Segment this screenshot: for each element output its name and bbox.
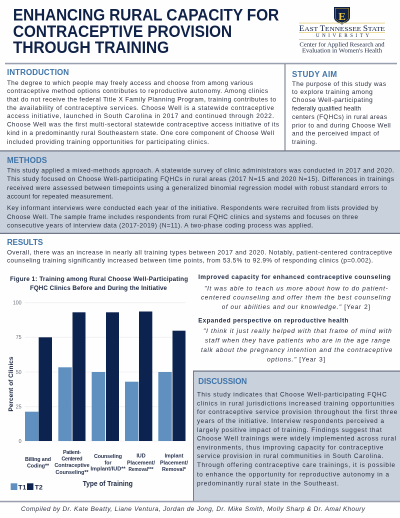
- quote: year 2: centered counseling and offer them the best counseling: [201, 294, 391, 301]
- title: [13, 6, 279, 57]
- text block: discussion body: predominantly rural state in the Southeast.: [197, 480, 339, 487]
- panel: qualitative findings: [198, 274, 393, 363]
- chart y axis labels: 25: [16, 404, 22, 410]
- heading: discussion: DISCUSSION: [198, 377, 247, 386]
- heading: introduction: INTRODUCTION: [7, 68, 69, 77]
- text block: study aim body: centers (FQHCs) in rural areas: [292, 114, 387, 121]
- text block: introduction body: kind in a predominantly rural Southeastern state. One core component of Choose Well: [7, 130, 274, 137]
- text block: results summary: counseling training significantly increased between time points, from 53.5% to 92.9% of responding clinics (p=0.002).: [7, 258, 373, 265]
- category labels: Contraceptive: [54, 463, 90, 469]
- logo: East Tennessee State University: [299, 7, 385, 54]
- panel: introduction: [7, 68, 279, 146]
- text block: methods body: Key informant interviews were conducted each year of the initiative. Respondents were recruited from lists provided by: [7, 205, 379, 212]
- logo: East Tennessee State University: UNIVERSITY: [316, 34, 370, 39]
- text block: results summary: Overall, there was an increase in nearly all training types between 2017 and 2020. Notably, patient-centered contraceptive: [7, 249, 392, 256]
- panel: results: [7, 238, 392, 265]
- text block: study aim body: Choose Well-participating: [292, 97, 373, 104]
- text block: results summary: [7, 249, 392, 265]
- chart: figure 1 grouped bar chart: [8, 276, 189, 492]
- category labels: Placement/: [160, 460, 189, 466]
- text block: methods body: This study focused on Choose Well-participating FQHCs in rural areas (2017 N=15 and 2020 N=15). Differences in trainings: [7, 176, 394, 183]
- category labels: for: [104, 460, 112, 466]
- text block: study aim body: [292, 81, 391, 146]
- category labels: IUD: [136, 454, 146, 460]
- category labels: Patient-: [63, 450, 81, 456]
- panel: discussion: [193, 370, 400, 502]
- heading: figure title: [10, 276, 188, 292]
- text block: introduction body: [7, 80, 279, 146]
- text block: discussion body: years of the initiative. Interview respondents perceived a: [197, 418, 384, 425]
- quote: year 3: "I think it just really helped with that frame of mind with: [203, 328, 392, 335]
- x axis title: Type of Training: [83, 481, 133, 488]
- footer: credits: Compiled by Dr. Kate Beatty, Liane Ventura, Jordan de Jong, Dr. Mike Smith, Molly Sharp & Dr. Amal Khoury: [21, 506, 366, 513]
- title: ENHANCING RURAL CAPACITY FOR: [13, 6, 279, 24]
- text block: discussion body: clinics in rural jurisdictions increased training opportunities: [197, 400, 394, 407]
- chart y axis labels: 75: [16, 335, 22, 341]
- category labels: Counseling: [94, 454, 122, 460]
- y axis title: Percent of Clinics: [8, 356, 15, 412]
- text block: introduction body: contraceptive method options contributes to reproductive autonomy. Among clinics: [7, 88, 268, 95]
- panel: methods: [0, 150, 400, 234]
- category labels: Implant: [165, 454, 184, 460]
- text block: study aim body: and the perceived impact of: [292, 130, 379, 137]
- logo: East Tennessee State University: Center for Applied Research and: [300, 41, 385, 48]
- logo: East Tennessee State University: Evaluation in Women's Health: [302, 48, 383, 54]
- heading: results: RESULTS: [7, 238, 43, 247]
- quote: year 3: talk about the pregnancy intention and the contraceptive: [201, 347, 393, 354]
- category labels: Implant/IUD**: [90, 466, 126, 472]
- chart y axis labels: [13, 300, 22, 445]
- text block: study aim body: federally qualified health: [292, 105, 361, 112]
- panel: study aim: [292, 70, 391, 146]
- bars: T2: [39, 312, 186, 441]
- category labels: Removal***: [128, 467, 154, 473]
- bars: T1: [25, 367, 172, 441]
- text block: methods body: account for repeated measurement.: [7, 194, 113, 201]
- heading: figure title: Figure 1: Training among Rural Choose Well-Participating: [10, 276, 188, 283]
- title: THROUGH TRAINING: [13, 39, 169, 57]
- text block: discussion body: This study indicates that Choose Well-participating FQHC: [197, 391, 387, 398]
- quote: year 2: [201, 285, 391, 311]
- text block: introduction body: Choose Well was the first multi-sectoral statewide contraceptive access initiative of its: [7, 121, 279, 128]
- text block: study aim body: The purpose of this study was: [292, 81, 386, 88]
- quote heading: expanded perspective: Expanded perspective on reproductive health: [198, 317, 349, 324]
- text block: methods body: received were assessed between timepoints using a generalized binomial regression model with robust standard errors to: [7, 185, 387, 192]
- text block: discussion body: largely positive impact of training. Findings suggest that: [197, 427, 382, 434]
- quote heading: improved capacity: Improved capacity for enhanced contraceptive counseling: [198, 274, 391, 281]
- legend: T2: [35, 484, 43, 492]
- heading: figure title: FQHC Clinics Before and During the Initiative: [30, 285, 168, 292]
- text block: discussion body: Through offering contraceptive care trainings, it is possible: [197, 462, 395, 469]
- text block: study aim body: training.: [292, 139, 317, 146]
- category labels: Removal*: [162, 467, 187, 473]
- text block: study aim body: prior to and during Choose Well: [292, 122, 391, 129]
- text block: introduction body: the availability of contraceptive services. Choose Well is a statewide contraceptive: [7, 105, 274, 112]
- category labels: Counseling**: [56, 470, 89, 476]
- text block: introduction body: access initiative, launched in South Carolina in 2017 and continued through 2022.: [7, 113, 274, 120]
- category labels: Placement/: [127, 460, 156, 466]
- text block: methods body: This study applied a mixed-methods approach. A statewide survey of clinic administrators was conducted in 2017 and 2020.: [7, 168, 394, 175]
- heading: study aim: STUDY AIM: [292, 70, 337, 79]
- legend: T1: [18, 484, 26, 492]
- text block: introduction body: included providing training opportunities for participating clinics.: [7, 139, 209, 146]
- logo: East Tennessee State University: EAST TENNESSEE STATE: [299, 24, 385, 33]
- text block: methods body: [7, 168, 394, 230]
- icon: university shield: E: [338, 11, 346, 23]
- text block: discussion body: for contraceptive service provision throughout the first three: [197, 409, 398, 416]
- text block: introduction body: The degree to which people may freely access and choose from among various: [7, 80, 253, 87]
- text block: discussion body: Choose Well trainings were widely implemented across rural: [197, 435, 396, 442]
- chart y axis labels: 100: [13, 300, 22, 306]
- text block: discussion body: to enhance the opportunity for reproductive autonomy in a: [197, 471, 389, 478]
- text block: discussion body: [197, 391, 398, 487]
- text block: methods body: consecutive years of interview data (2017-2019) (N=11). A two-phase coding process was applied.: [7, 223, 313, 230]
- category labels: Centered: [62, 457, 82, 463]
- quote: year 3: staff when they have patients who are in the age range: [205, 338, 390, 345]
- quote: year 2: of our abilities and our knowledge." [Year 2]: [222, 304, 370, 311]
- text block: study aim body: to explore training among: [292, 89, 373, 96]
- legend: [11, 483, 43, 492]
- quote: year 3: [201, 328, 393, 363]
- heading: methods: METHODS: [7, 156, 47, 165]
- category labels: Billing and: [25, 457, 51, 463]
- text block: methods body: Choose Well. The sample frame includes respondents from rural FQHC clinics and systems and focuses on three: [7, 214, 358, 221]
- quote: year 2: "It was able to teach us more about how to do patient-: [204, 285, 388, 292]
- chart y axis labels: 50: [16, 370, 22, 376]
- title: CONTRACEPTIVE PROVISION: [13, 23, 232, 41]
- text block: discussion body: service provision in rural communities in South Carolina.: [197, 453, 384, 460]
- category labels: Coding**: [27, 464, 50, 470]
- chart y axis labels: 0: [19, 439, 22, 445]
- quote: year 3: options." [Year 3]: [267, 356, 325, 363]
- text block: discussion body: environments, thus improving capacity for contraceptive: [197, 444, 384, 451]
- category labels: [25, 450, 189, 476]
- text block: introduction body: that do not receive the federal Title X Family Planning Program, training contributes to: [7, 96, 276, 103]
